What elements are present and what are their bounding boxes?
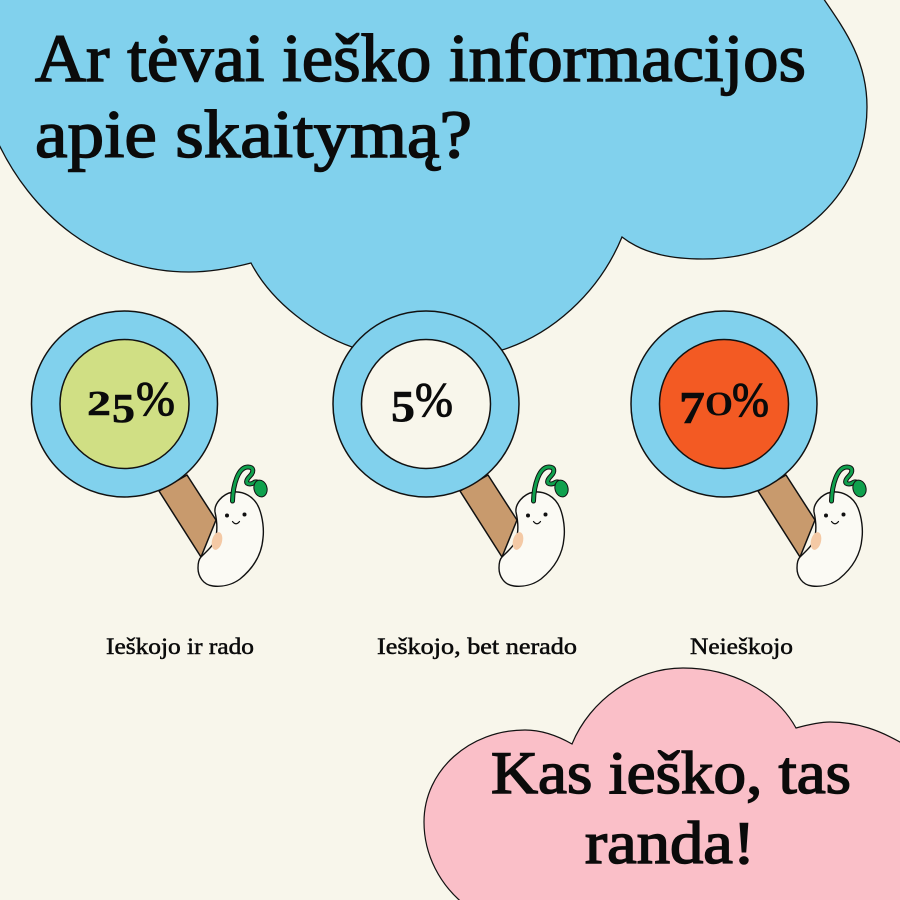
magnifier 25%: % (136, 371, 175, 426)
title: apie skaitymą? (35, 96, 472, 172)
label: found: Ieškojo ir rado (106, 634, 254, 659)
magnifier 70%: 0 (705, 386, 733, 423)
closing message (491, 740, 851, 876)
label: not found: Ieškojo, bet nerado (377, 634, 577, 659)
closing message: randa! (585, 810, 755, 876)
blue cloud (0, 0, 867, 369)
magnifier 25%: 5 (112, 385, 135, 431)
magnifier 5%: 5 (391, 382, 415, 431)
magnifier 5%: % (415, 372, 453, 427)
label: did not search: Neieškojo (690, 634, 793, 659)
title: Ar tėvai ieško informacijos (35, 20, 806, 96)
magnifier 70%: 7 (679, 382, 705, 433)
magnifier 25%: 2 (87, 384, 111, 423)
magnifier 70% (631, 311, 868, 586)
pink cloud (424, 668, 900, 900)
magnifier 70%: % (732, 372, 769, 427)
magnifier 5% (333, 311, 570, 586)
magnifier 25% (32, 311, 269, 586)
closing message: Kas ieško, tas (491, 740, 851, 806)
title (35, 20, 806, 172)
